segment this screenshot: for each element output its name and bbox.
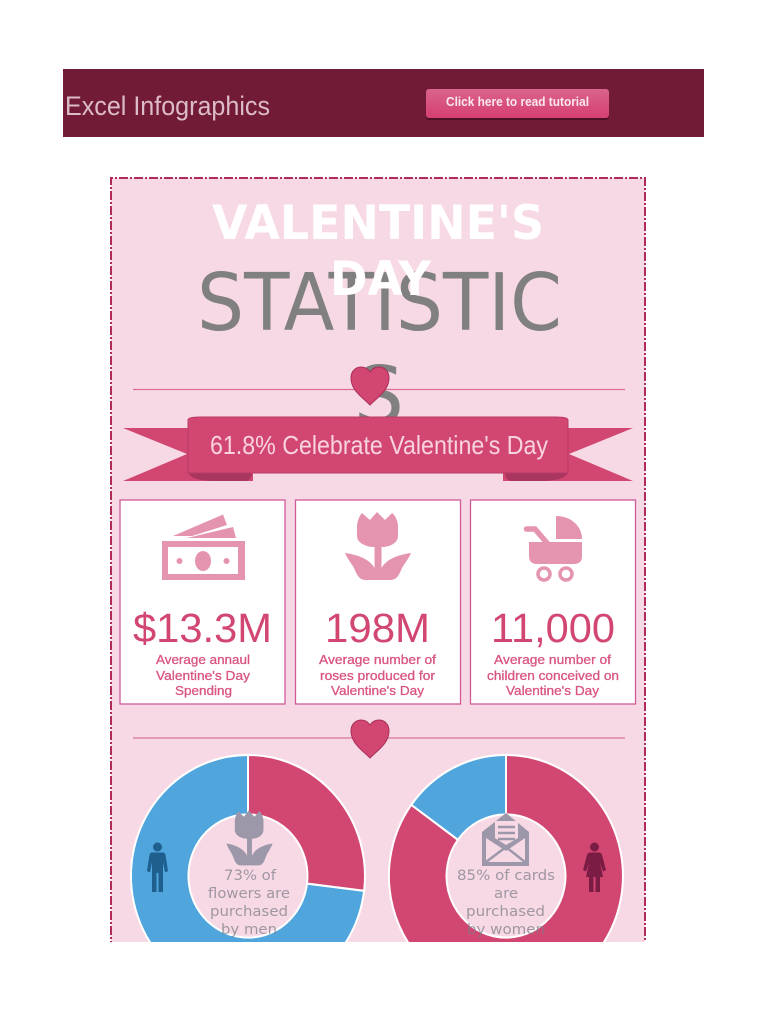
donut text: cards: are [494, 886, 518, 902]
top divider with heart [133, 367, 625, 405]
label: roses [319, 652, 436, 698]
label: spending: Average annaul [156, 652, 250, 667]
donut chart: cards [388, 754, 624, 942]
label: roses: roses produced for [320, 668, 436, 683]
donut chart: flowers [130, 754, 366, 942]
donut text: cards: by women [467, 922, 545, 938]
label: children [487, 652, 619, 698]
title: valentine's day: DAY [330, 252, 432, 307]
icon: woman [583, 842, 606, 892]
tutorial button [426, 89, 609, 120]
title: statistics: S [354, 350, 404, 442]
main panel [111, 178, 645, 997]
ribbon banner [123, 417, 633, 481]
icon: stroller [526, 516, 582, 580]
label: spending: Valentine's Day [156, 668, 251, 683]
donut ring: flowers [130, 754, 366, 942]
tutorial button: Click here to read tutorial [446, 94, 589, 109]
ribbon text: 61.8% Celebrate Valentine's Day [210, 430, 548, 460]
donut text: flowers: 73% of [224, 868, 277, 884]
label: roses: Average number of [319, 652, 436, 667]
label: spending [156, 652, 251, 698]
label: roses: Valentine's Day [331, 683, 425, 698]
icon: man [147, 842, 168, 892]
card: spending [120, 500, 285, 704]
donut ring: cards [388, 754, 624, 942]
label: spending: Spending [175, 683, 232, 698]
title: valentine's day [212, 204, 541, 295]
label: children: Valentine's Day [506, 683, 600, 698]
icon: tulip [345, 512, 411, 580]
icon: gray tulip [226, 810, 273, 865]
card: roses [296, 500, 460, 704]
donut text: cards [457, 868, 555, 938]
donut text: flowers: by men [221, 922, 277, 938]
stat: 198M: 198M [325, 605, 430, 651]
header banner [63, 69, 704, 137]
middle divider with heart [133, 720, 625, 758]
donut text: flowers: flowers are [208, 886, 290, 902]
label: children: children conceived on [487, 668, 619, 683]
donut text: cards: purchased [466, 904, 545, 920]
label: children: Average number of [494, 652, 611, 667]
icon: money [162, 514, 245, 580]
title: statistics [202, 271, 558, 416]
header title: Excel Infographics [65, 91, 270, 121]
card: children [470, 500, 636, 704]
stat: 11,000: 11,000 [491, 605, 615, 651]
icon: envelope [482, 813, 529, 866]
donut text: cards: 85% of cards [457, 868, 555, 884]
stat: 13.3M: $13.3M [133, 605, 272, 651]
donut text: flowers [208, 868, 290, 938]
title: statistics: STATISTIC [197, 257, 562, 349]
donut text: flowers: purchased [210, 904, 288, 920]
title: valentine's day: VALENTINE'S [212, 196, 544, 251]
